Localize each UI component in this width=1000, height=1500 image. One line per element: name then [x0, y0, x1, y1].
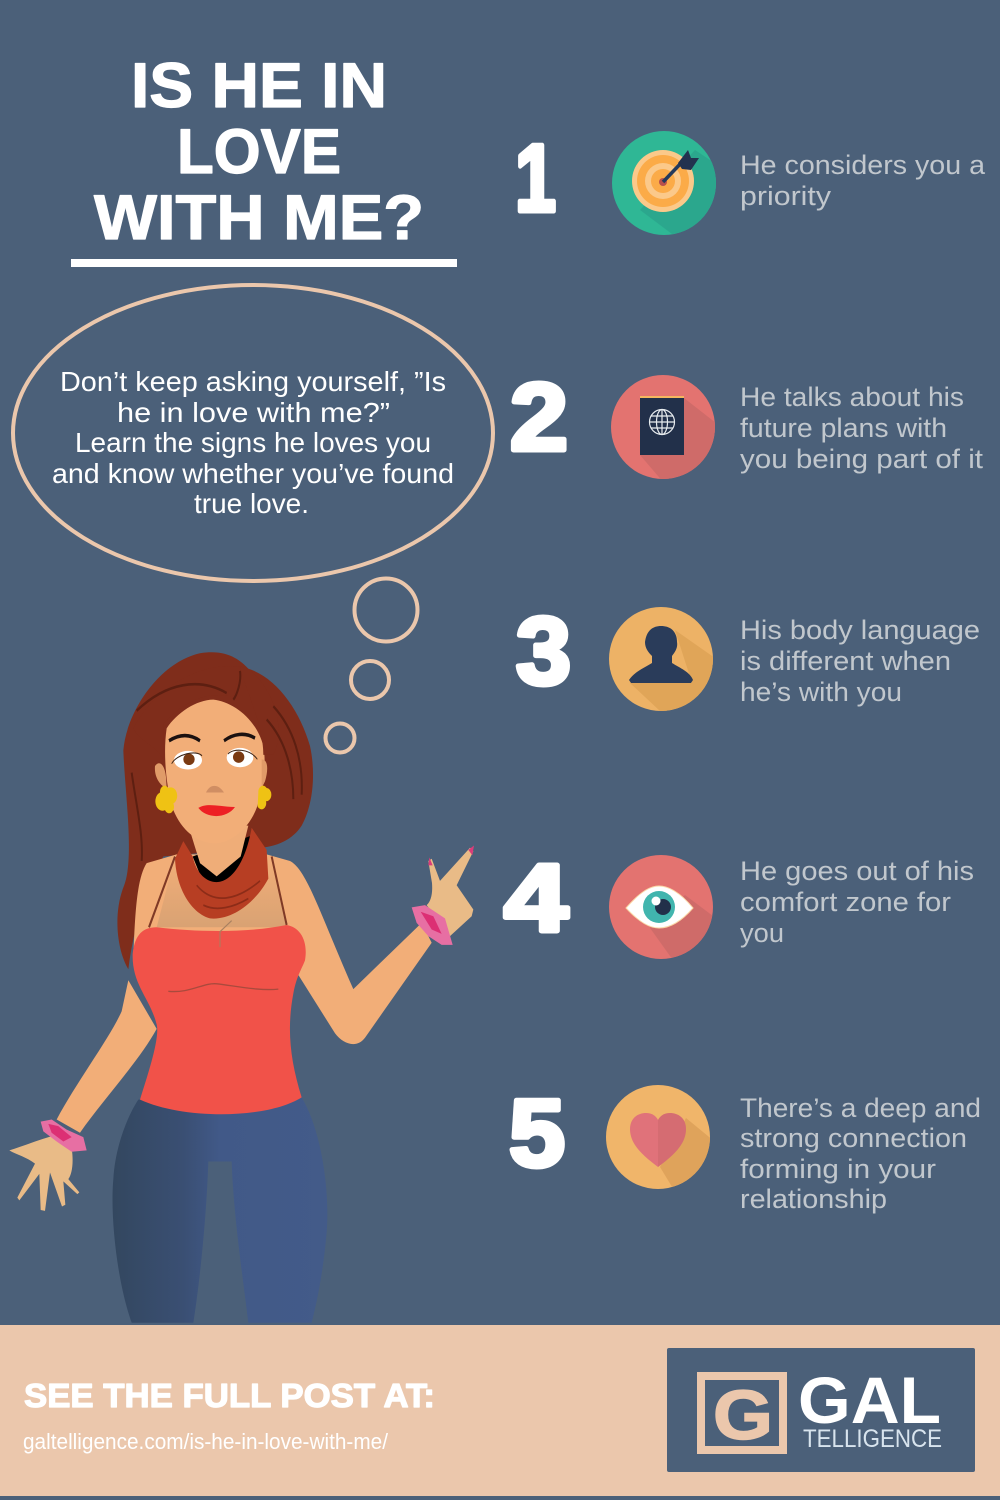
- hair fringe: [133, 666, 279, 759]
- nose: [206, 786, 224, 792]
- icon: passport: [611, 375, 715, 479]
- sign text 2: future plans with: [740, 413, 947, 443]
- footer band: [0, 1325, 1000, 1496]
- number 2: 2: [510, 364, 568, 471]
- number 4: 4: [504, 845, 568, 952]
- sign text 3: [740, 615, 980, 707]
- lips: [198, 805, 235, 816]
- sign text 3: he’s with you: [740, 677, 902, 707]
- sign 5: [509, 1080, 981, 1214]
- sign text 2: you being part of it: [740, 444, 984, 474]
- sign text 5: forming in your: [740, 1154, 936, 1184]
- neck and necklace shadow: [193, 834, 255, 885]
- title: WITH ME?: [94, 183, 424, 253]
- scarf: [175, 828, 268, 919]
- top: [133, 925, 306, 1114]
- thought bubble text: Don’t keep asking yourself, ”Is: [60, 366, 446, 397]
- pointing hand: [427, 848, 473, 936]
- illustration: woman pointing: [9, 652, 474, 1323]
- eyes: [172, 748, 257, 769]
- earrings: [155, 786, 271, 813]
- sign text 5: relationship: [740, 1184, 887, 1214]
- sign text 4: [740, 856, 974, 948]
- halter straps: [149, 857, 287, 927]
- sign 4: [502, 855, 973, 959]
- icon: eye: [609, 855, 713, 959]
- sign text 4: He goes out of his: [740, 856, 974, 886]
- thought bubble text: [52, 366, 454, 519]
- sign text 4: you: [740, 918, 784, 948]
- shoulders and right arm: [133, 854, 432, 1044]
- title: LOVE: [177, 117, 341, 187]
- title: [71, 51, 457, 267]
- thought bubble text: true love.: [194, 488, 309, 519]
- sign 1: [518, 131, 986, 235]
- number 1: 1: [515, 125, 556, 232]
- logo: TELLIGENCE: [803, 1425, 942, 1453]
- eyebrows: [169, 734, 255, 741]
- sign text 1: [740, 150, 986, 211]
- sign 3: [516, 607, 979, 711]
- thought bubble: [13, 285, 493, 752]
- title: IS HE IN: [131, 51, 387, 121]
- hair: [117, 652, 313, 969]
- sign text 5: strong connection: [740, 1123, 967, 1153]
- sign text 1: He considers you a: [740, 150, 986, 180]
- jeans: [112, 1097, 327, 1323]
- sign text 1: priority: [740, 181, 832, 211]
- left arm and hand: [57, 980, 157, 1133]
- sign text 2: [740, 382, 984, 474]
- thought bubble text: Learn the signs he loves you: [75, 427, 431, 458]
- icon: target: [612, 131, 716, 235]
- sign text 5: [740, 1093, 981, 1214]
- sign text 5: There’s a deep and: [740, 1093, 981, 1123]
- icon: person silhouette: [609, 607, 713, 711]
- thought bubble text: he in love with me?”: [117, 397, 390, 428]
- sign text 2: He talks about his: [740, 382, 964, 412]
- sign 2: [510, 375, 983, 479]
- face: [165, 700, 265, 843]
- logo: [667, 1348, 975, 1472]
- sign text 4: comfort zone for: [740, 887, 951, 917]
- number 3: 3: [516, 598, 571, 705]
- logo: G: [713, 1376, 773, 1454]
- thought bubble text: and know whether you’ve found: [52, 458, 454, 489]
- number 5: 5: [509, 1080, 565, 1187]
- right scrunchie: [412, 905, 453, 945]
- footer heading: SEE THE FULL POST AT:: [24, 1377, 435, 1414]
- logo: GAL: [798, 1363, 941, 1437]
- sign text 3: is different when: [740, 646, 951, 676]
- footer url: galtelligence.com/is-he-in-love-with-me/: [23, 1429, 389, 1454]
- sign text 3: His body language: [740, 615, 980, 645]
- icon: heart: [606, 1085, 710, 1189]
- left scrunchie: [41, 1119, 87, 1152]
